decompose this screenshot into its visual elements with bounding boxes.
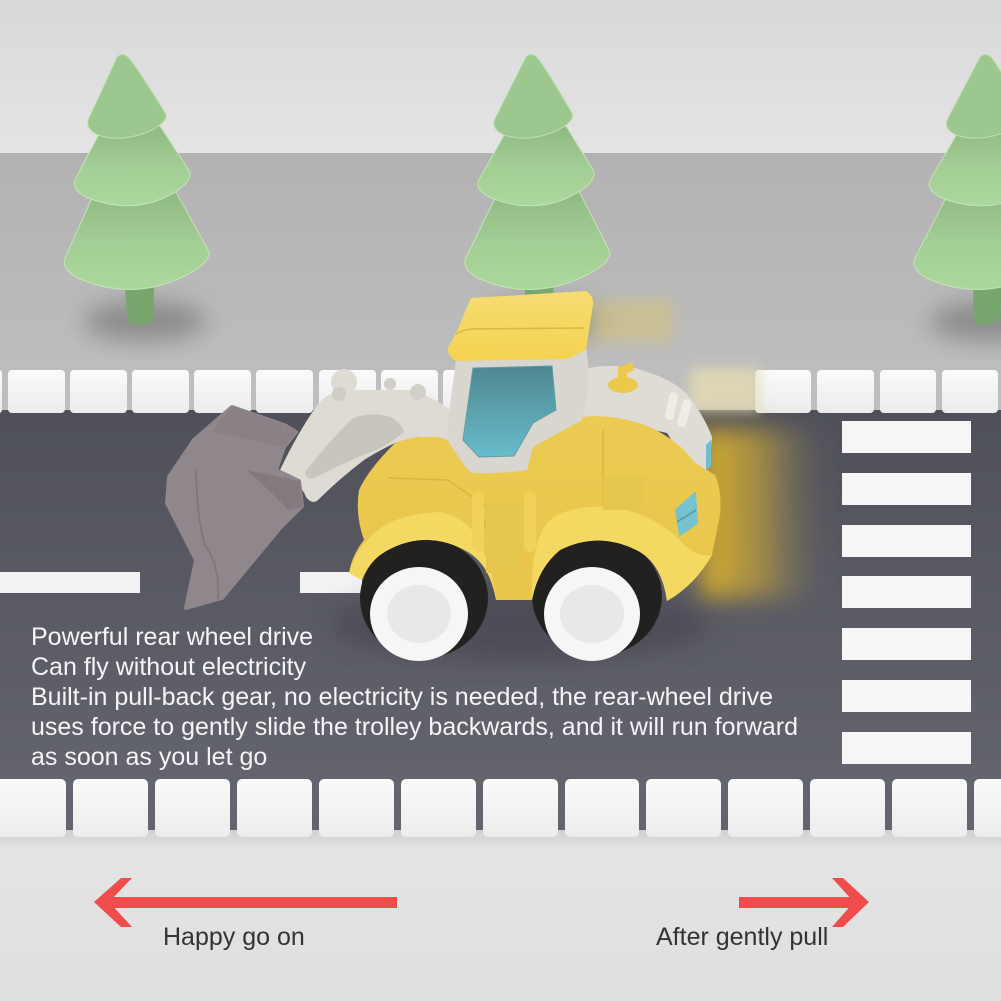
- tree left: [64, 54, 209, 341]
- road shadow: [330, 589, 710, 661]
- loader arm: [280, 369, 450, 502]
- upper curb stones: [0, 370, 998, 413]
- description text: as soon as you let go: [31, 743, 267, 771]
- toy loader: [167, 291, 720, 661]
- description text: Can fly without electricity: [31, 653, 307, 681]
- cab window: [463, 366, 556, 457]
- engine vents: [664, 391, 692, 428]
- engine cover: [580, 366, 712, 474]
- cab roof: [448, 291, 593, 361]
- road surface: [0, 410, 1001, 832]
- grey ground strip: [0, 153, 1001, 413]
- cab frame: [448, 347, 589, 473]
- exhaust cap: [608, 362, 638, 393]
- lower curb stones: [0, 779, 1001, 837]
- bucket: [167, 406, 303, 608]
- label: after gently pull: After gently pull: [656, 923, 828, 951]
- crosswalk stripes: [842, 421, 971, 764]
- blue side strip: [706, 440, 711, 470]
- tree right: [909, 54, 1001, 341]
- description text: Built-in pull-back gear, no electricity is needed, the rear-wheel drive: [31, 683, 773, 711]
- description text: Powerful rear wheel drive: [31, 623, 313, 651]
- lower pavement: [0, 830, 1001, 1001]
- left red arrow: [94, 878, 397, 927]
- description text: uses force to gently slide the trolley backwards, and it will run forward: [31, 713, 798, 741]
- tree centre: [462, 54, 618, 341]
- description text: [31, 623, 798, 771]
- wheels: [360, 536, 662, 661]
- right red arrow: [739, 878, 869, 927]
- yellow body: [349, 416, 720, 601]
- label: happy go on: Happy go on: [163, 923, 305, 951]
- background wall: [0, 0, 1001, 154]
- blue headlight: [676, 493, 697, 535]
- motion blur behind toy: [592, 300, 825, 598]
- lane markings: [0, 572, 362, 593]
